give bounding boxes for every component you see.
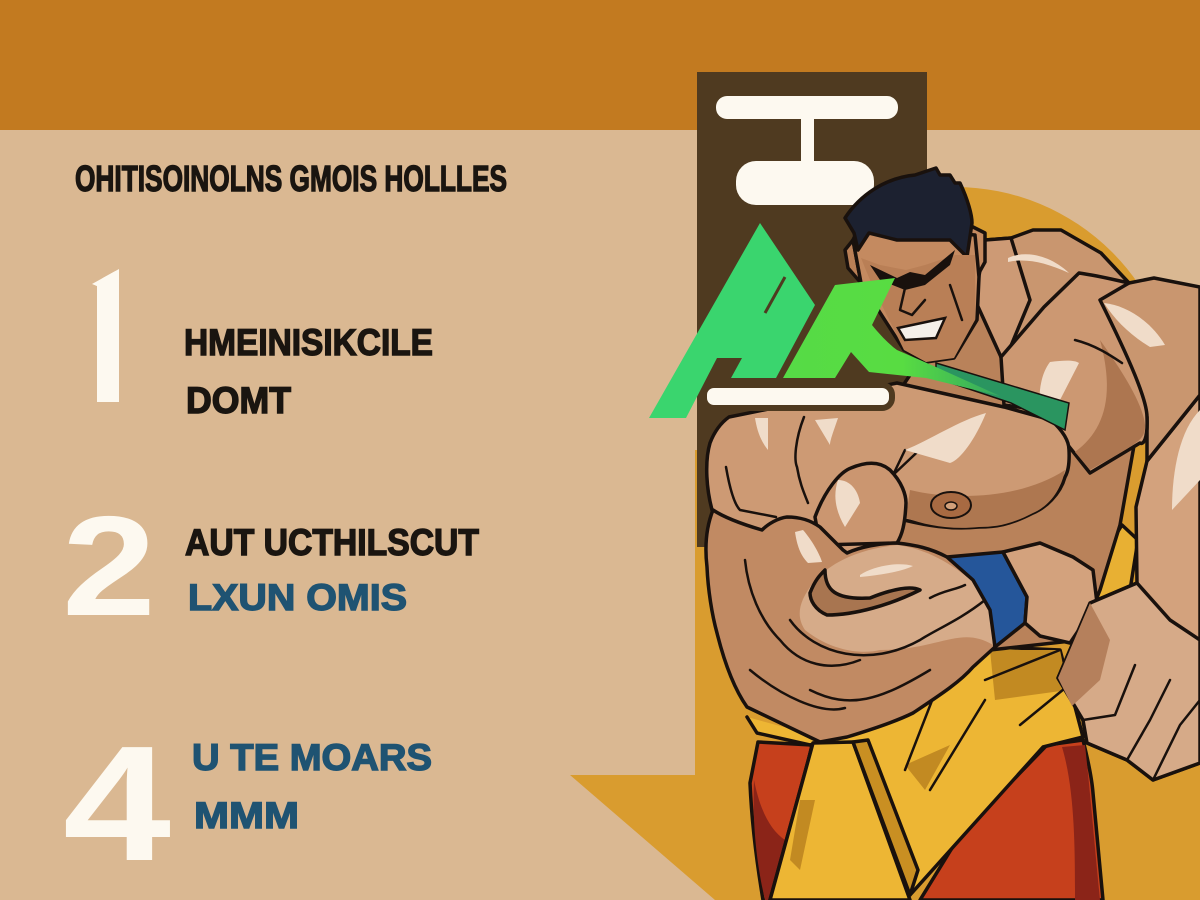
head: [845, 168, 985, 362]
logo letter A: [649, 223, 815, 418]
item 1 text: [184, 322, 433, 421]
muscular figure: [706, 168, 1200, 900]
item 1 text: DOMT: [186, 380, 291, 421]
neck: [975, 238, 1030, 357]
chest shadow: [906, 470, 1065, 528]
blue wrist band: [947, 552, 1027, 647]
forearm inner shadow: [810, 570, 920, 615]
arm detail lines: [745, 560, 985, 709]
neck and torso: [880, 300, 1135, 650]
dark column: [697, 72, 927, 547]
big arm: [706, 510, 995, 742]
item 2 text: LXUN OMIS: [188, 577, 407, 618]
item 4 text: [192, 737, 432, 836]
nipple: [931, 492, 971, 518]
heading: OHITISOINOLNS GMOIS HOLLLES: [75, 158, 507, 199]
chest detail lines: [726, 340, 1122, 517]
trousers: [750, 740, 1103, 900]
muscle highlights: [755, 254, 1200, 577]
deltoid muscle: [1001, 273, 1147, 473]
chest: [707, 383, 1069, 560]
column icon: white bars: [716, 96, 898, 205]
item 2 text: [185, 522, 479, 618]
item 2 text: AUT UCTHILSCUT: [185, 522, 479, 563]
fist: [1058, 583, 1200, 780]
deltoid shadow: [1075, 340, 1145, 470]
trapezius and back of arm: [985, 230, 1200, 461]
item 1 number: 1: [51, 231, 157, 443]
item 4 text: U TE MOARS: [192, 737, 432, 778]
forearm light area: [800, 545, 993, 652]
top band: [0, 0, 1200, 130]
logo letter K: [783, 278, 1000, 396]
gold circle and arrow backdrop: [570, 187, 1200, 900]
far arm and forearm: [1058, 395, 1200, 780]
green strap: [936, 363, 1069, 430]
bicep ball: [815, 463, 906, 545]
logo letter A slit: [765, 277, 785, 313]
item 4 number: 4: [63, 712, 171, 895]
yellow sash: [747, 525, 1138, 900]
item 1 text: HMEINISIKCILE: [184, 322, 433, 363]
item 4 text: MMM: [194, 795, 299, 836]
gripping hand: [1003, 543, 1097, 643]
item 2 number: 2: [62, 487, 156, 646]
green logo: [649, 223, 1000, 418]
bottom white pill: [704, 385, 892, 408]
